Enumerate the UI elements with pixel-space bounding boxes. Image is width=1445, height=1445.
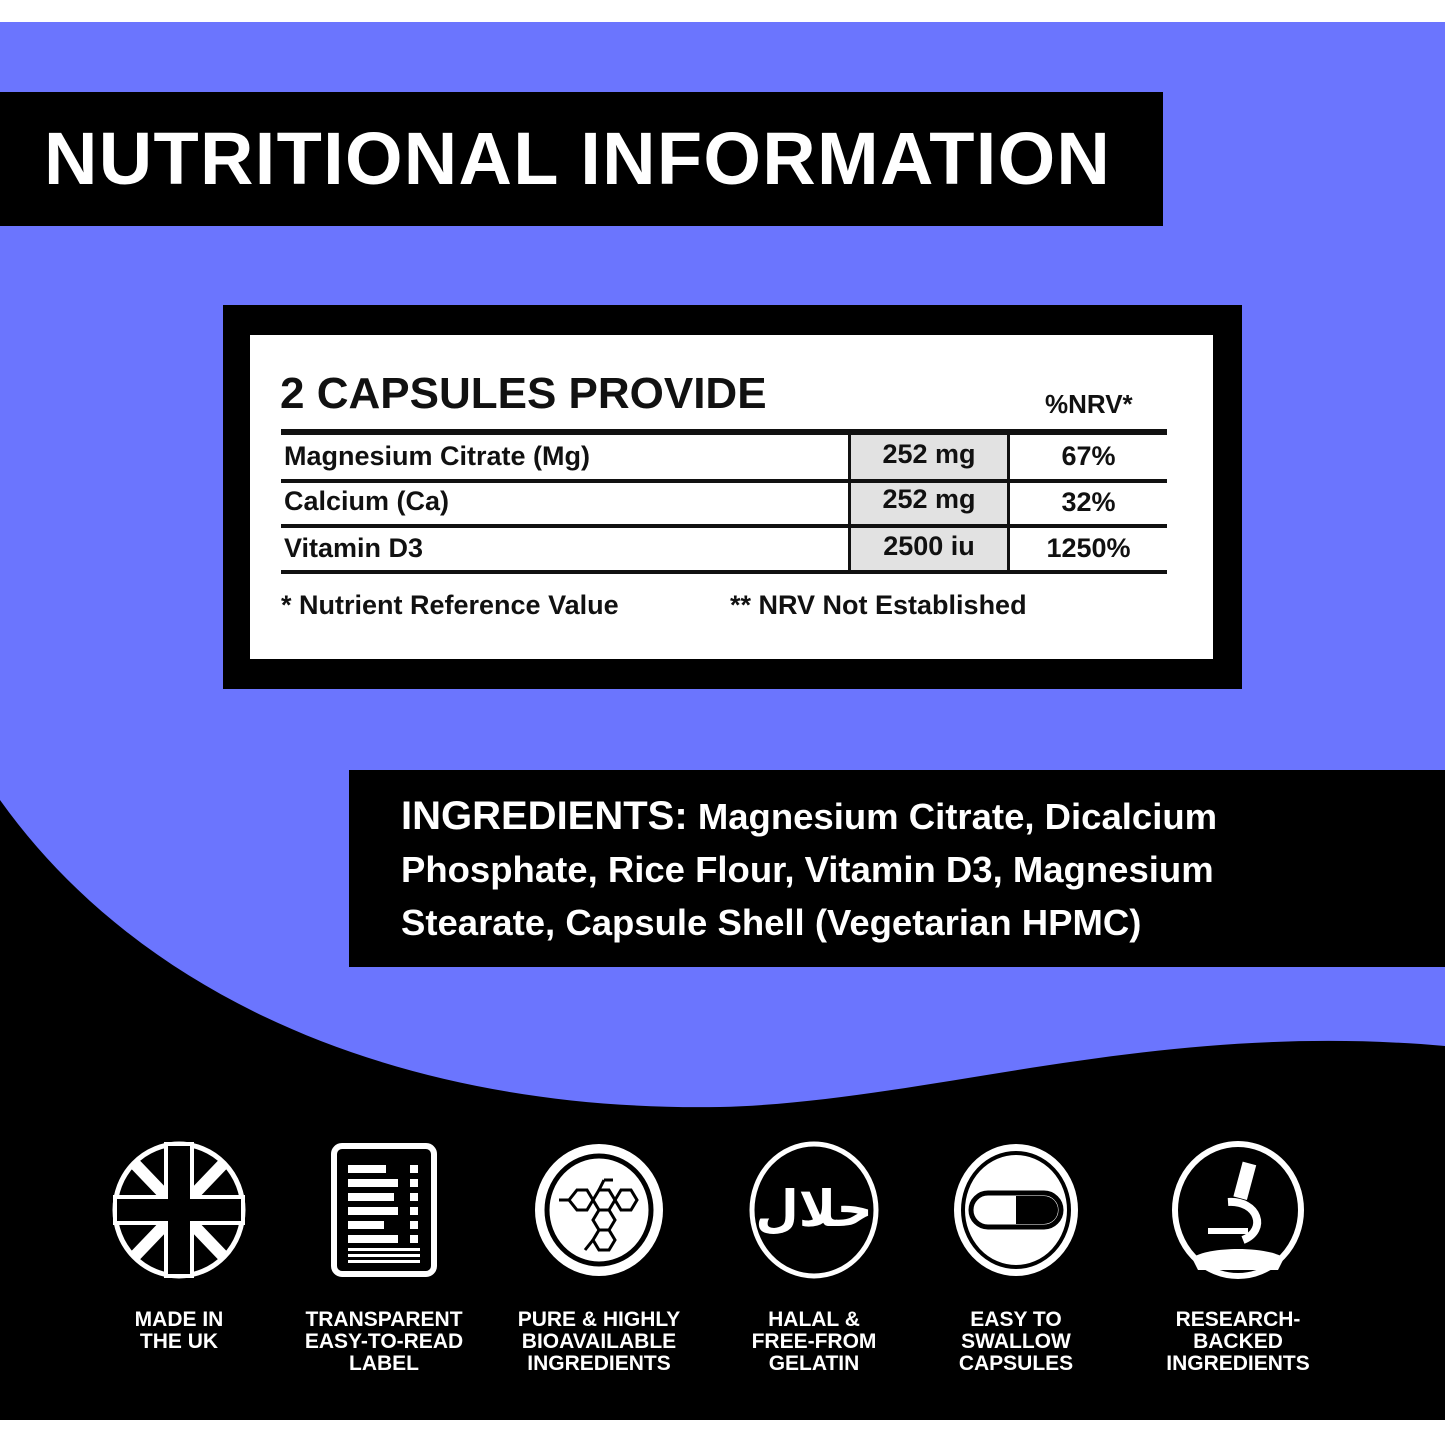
table rows: 32% — [1061, 487, 1116, 517]
table rows: 252 mg — [882, 484, 976, 514]
icon labels: EASY-TO-READ — [305, 1330, 463, 1353]
icon labels: EASY TO — [970, 1308, 1062, 1331]
icons row — [112, 1141, 1304, 1279]
panel: ingredients: Stearate, Capsule Shell (Vegetarian HPMC) — [401, 902, 1141, 943]
table rows: Calcium (Ca) — [284, 486, 449, 516]
icon labels: INGREDIENTS — [527, 1352, 671, 1375]
icon labels: SWALLOW — [961, 1330, 1071, 1353]
panel: ingredients — [349, 770, 1445, 967]
icon labels: HALAL & — [768, 1308, 860, 1331]
icon labels: TRANSPARENT — [305, 1308, 463, 1331]
icon labels: GELATIN — [769, 1352, 859, 1375]
table rows: 2500 iu — [883, 531, 975, 561]
title: NUTRITIONAL INFORMATION — [44, 117, 1111, 200]
table rows: 67% — [1061, 441, 1116, 471]
panel: nutrition table: ** NRV Not Established — [730, 590, 1027, 620]
table heading: 2 CAPSULES PROVIDE — [280, 369, 767, 418]
icon labels: RESEARCH- — [1176, 1308, 1300, 1331]
table rows — [281, 429, 1167, 574]
nrv header: %NRV* — [1045, 389, 1133, 419]
footnotes: * Nutrient Reference Value — [281, 590, 619, 620]
table rows: 252 mg — [882, 439, 976, 469]
panel: nutrition table — [223, 305, 1242, 689]
icon: uk flag — [115, 1144, 243, 1276]
icon labels: LABEL — [349, 1352, 419, 1375]
icon: capsule — [954, 1144, 1078, 1276]
panel: ingredients: INGREDIENTS: Magnesium Citrate, Dicalcium — [401, 794, 1217, 838]
icon: microscope — [1175, 1144, 1301, 1276]
icon labels: BACKED — [1193, 1330, 1283, 1353]
icon labels: MADE IN — [135, 1308, 223, 1331]
icon labels: PURE & HIGHLY — [518, 1308, 680, 1331]
icon labels: INGREDIENTS — [1166, 1352, 1310, 1375]
icon labels: FREE-FROM — [752, 1330, 876, 1353]
icon labels — [135, 1308, 1310, 1375]
table rows: Magnesium Citrate (Mg) — [284, 441, 590, 471]
icon: label — [334, 1146, 434, 1274]
table rows: 1250% — [1046, 533, 1131, 563]
icon labels: CAPSULES — [959, 1352, 1073, 1375]
icon labels: BIOAVAILABLE — [522, 1330, 676, 1353]
icon: molecule — [535, 1144, 663, 1276]
icon labels: THE UK — [140, 1330, 218, 1353]
title — [0, 92, 1163, 226]
icon: halal — [752, 1144, 876, 1276]
table rows: Vitamin D3 — [284, 533, 423, 563]
icon: halal: حلال — [755, 1180, 873, 1238]
panel: ingredients: Phosphate, Rice Flour, Vitamin D3, Magnesium — [401, 849, 1214, 890]
